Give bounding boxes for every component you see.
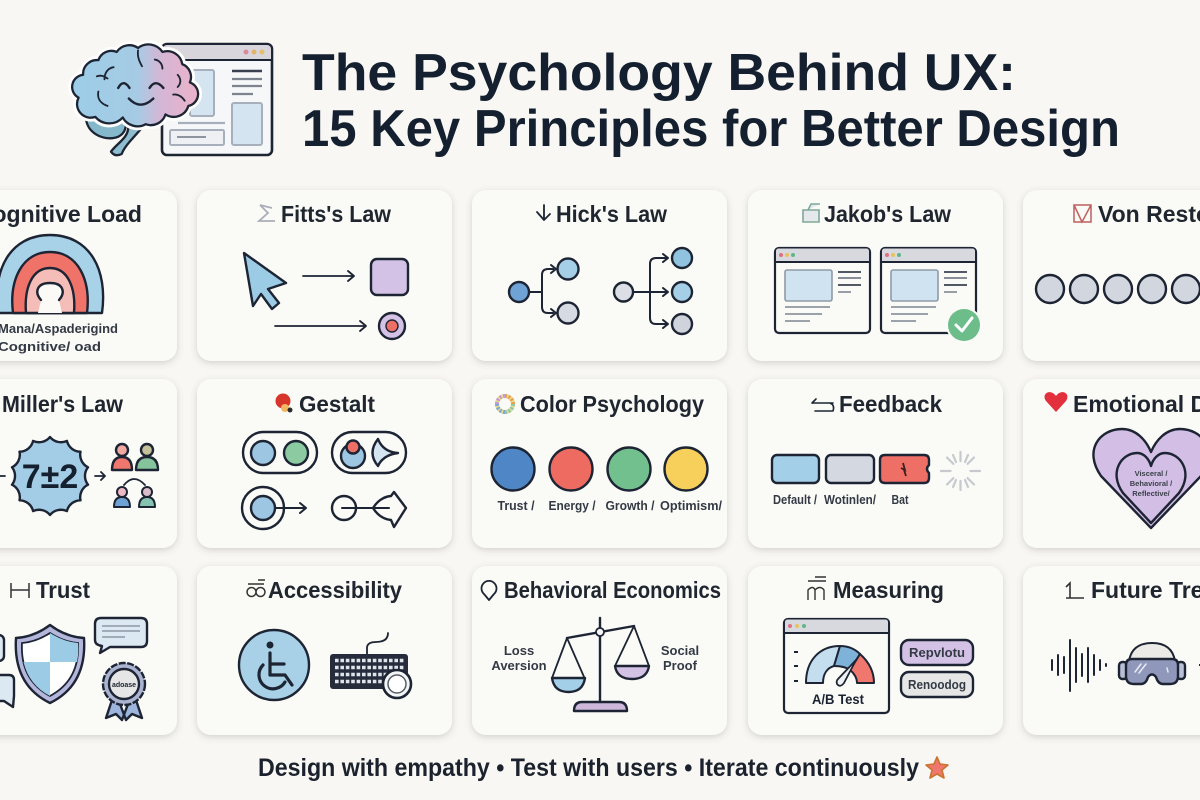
icon: dashboard window bbox=[784, 619, 889, 713]
label: cognitive load text: Mana/Aspaderigind bbox=[0, 321, 118, 336]
panel: Measuring bbox=[748, 566, 1003, 735]
heading: Behavioral Economics: Behavioral Economics bbox=[504, 577, 721, 603]
pill: repeat bbox=[901, 640, 973, 665]
label: loss aversion: Aversion bbox=[491, 658, 547, 673]
icon: closure arrow bbox=[332, 492, 406, 527]
icon: brain and browser window bbox=[72, 44, 272, 155]
icon: heading clipboard bbox=[803, 204, 820, 222]
icon: large target bbox=[371, 259, 408, 295]
arrow: to small target bbox=[275, 321, 366, 331]
swatch: optimism: Optimism/ bbox=[660, 498, 722, 513]
heading: Color Psychology: Color Psychology bbox=[520, 391, 704, 417]
label: social proof bbox=[661, 643, 699, 673]
label: loss aversion: Loss bbox=[504, 643, 534, 658]
icon: heading pin bbox=[482, 581, 497, 600]
swatch: trust: Trust / bbox=[498, 498, 535, 513]
icon: award badge: adoase bbox=[112, 682, 136, 689]
icon: partial dash bbox=[1199, 664, 1200, 666]
icon: heading arrow bbox=[537, 205, 550, 220]
icon: browser window bbox=[162, 44, 272, 155]
diagram: layered heart bbox=[1093, 429, 1200, 528]
panel: Accessibility bbox=[197, 566, 452, 735]
icon: wheelchair bbox=[239, 630, 309, 700]
icon: heading glyph bbox=[808, 577, 826, 600]
icon: load arches bbox=[0, 235, 103, 313]
swatch: growth bbox=[606, 448, 655, 513]
icon: color wheel bbox=[497, 396, 513, 412]
button: default bbox=[772, 455, 819, 507]
icon: heading swap bbox=[812, 399, 834, 411]
label: cognitive load text: Cognitive/ oad bbox=[0, 339, 101, 354]
heading: Feedback: Feedback bbox=[839, 391, 942, 417]
diagram: layered heart: Reflective/ bbox=[1132, 489, 1171, 498]
swatch: trust bbox=[492, 448, 535, 513]
icon: balance scale bbox=[552, 618, 649, 711]
diagram: layered heart: Behavioral / bbox=[1130, 479, 1173, 488]
icon: dashboard window: A/B Test bbox=[812, 691, 864, 707]
diagram: row of circles bbox=[1036, 275, 1200, 303]
heading: Hick's Law: Hick's Law bbox=[556, 201, 667, 227]
icon: green check bbox=[946, 307, 982, 343]
icon: speech bubble right bbox=[95, 618, 147, 653]
icon: concentric arrow bbox=[242, 487, 306, 529]
title bbox=[302, 44, 1120, 158]
panel: Von Restorff bbox=[1023, 190, 1200, 361]
arrow: badge to people bbox=[0, 472, 105, 480]
icon: heading glyph bbox=[247, 580, 265, 596]
icon: speech bubbles left bbox=[0, 635, 14, 707]
panel: Future Trends bbox=[1023, 566, 1200, 735]
icon: small target bbox=[379, 313, 405, 339]
swatch: growth: Growth / bbox=[606, 498, 655, 513]
icon: 7±2 badge: 7±2 bbox=[22, 458, 78, 496]
icon: loading spinner bbox=[941, 452, 980, 490]
icon: brain stem bbox=[86, 118, 143, 155]
diagram: layered heart: Visceral / bbox=[1135, 469, 1168, 478]
icon: keyboard bbox=[330, 633, 411, 698]
swatch: energy bbox=[548, 448, 596, 513]
panel: Cognitive Load bbox=[0, 190, 177, 361]
icon: star bbox=[926, 757, 948, 778]
icon: shield bbox=[16, 625, 84, 703]
footer tagline: Design with empathy • Test with users • Iterate continuously bbox=[258, 754, 919, 782]
button: hover: Wotinlen/ bbox=[824, 492, 876, 507]
icon: cursor bbox=[244, 253, 286, 309]
icon: heading measure bbox=[11, 583, 29, 598]
title: The Psychology Behind UX: bbox=[302, 44, 1016, 102]
title: 15 Key Principles for Better Design bbox=[302, 100, 1120, 158]
icon: voice waveform bbox=[1052, 640, 1106, 691]
button: default: Default / bbox=[773, 492, 817, 507]
label: social proof: Social bbox=[661, 643, 699, 658]
icon: heading heart bbox=[1045, 392, 1067, 412]
icon: heading glyph bbox=[1066, 583, 1084, 598]
icon: smiling brain bbox=[72, 44, 198, 126]
panel: Feedback bbox=[748, 379, 1003, 548]
label: social proof: Proof bbox=[663, 658, 698, 673]
heading: Jakob's Law: Jakob's Law bbox=[824, 201, 951, 227]
panel: Fitts's Law bbox=[197, 190, 452, 361]
icon: 7±2 badge bbox=[12, 437, 88, 515]
icon: people groups bbox=[112, 444, 158, 507]
panel: Jakob's Law bbox=[748, 190, 1003, 361]
icon: heading sigma bbox=[259, 205, 275, 221]
label: loss aversion bbox=[491, 643, 547, 673]
pill: repeat: Repvlotu bbox=[909, 645, 965, 660]
heading: Trust: Trust bbox=[36, 577, 90, 603]
heading: Accessibility: Accessibility bbox=[268, 577, 402, 603]
diagram: three choices bbox=[614, 248, 692, 334]
panel: Behavioral Economics bbox=[472, 566, 727, 735]
icon: heading blob bbox=[276, 394, 292, 412]
diagram: two choices bbox=[509, 258, 578, 324]
icon: proximity pill bbox=[243, 432, 317, 473]
button: error: Bat bbox=[892, 492, 909, 507]
icon: browser window right bbox=[881, 248, 976, 333]
panel: Hick's Law bbox=[472, 190, 727, 361]
pill: renoodog bbox=[901, 672, 973, 697]
panel: Trust bbox=[0, 566, 177, 735]
swatch: optimism bbox=[660, 448, 722, 513]
button: hover bbox=[824, 455, 876, 507]
icon: similarity pill bbox=[332, 432, 406, 473]
icon: VR headset bbox=[1119, 643, 1185, 684]
label: cognitive load text bbox=[0, 321, 118, 354]
heading: Miller's Law: Miller's Law bbox=[2, 391, 123, 417]
heading: Measuring: Measuring bbox=[833, 577, 944, 603]
pill: renoodog: Renoodog bbox=[908, 677, 966, 692]
icon: heading bookmark bbox=[1074, 205, 1091, 222]
panel: Color Psychology bbox=[472, 379, 727, 548]
swatch: energy: Energy / bbox=[548, 498, 596, 513]
heading: Fitts's Law: Fitts's Law bbox=[281, 201, 391, 227]
heading: Gestalt: Gestalt bbox=[299, 391, 375, 417]
panel: Gestalt bbox=[197, 379, 452, 548]
icon: browser window left bbox=[775, 248, 870, 333]
icon: award badge bbox=[103, 663, 145, 720]
panel: Emotional Design bbox=[1023, 379, 1200, 548]
panel: Miller's Law bbox=[0, 379, 177, 548]
button: error bbox=[880, 455, 929, 507]
arrow: to large target bbox=[303, 271, 354, 281]
